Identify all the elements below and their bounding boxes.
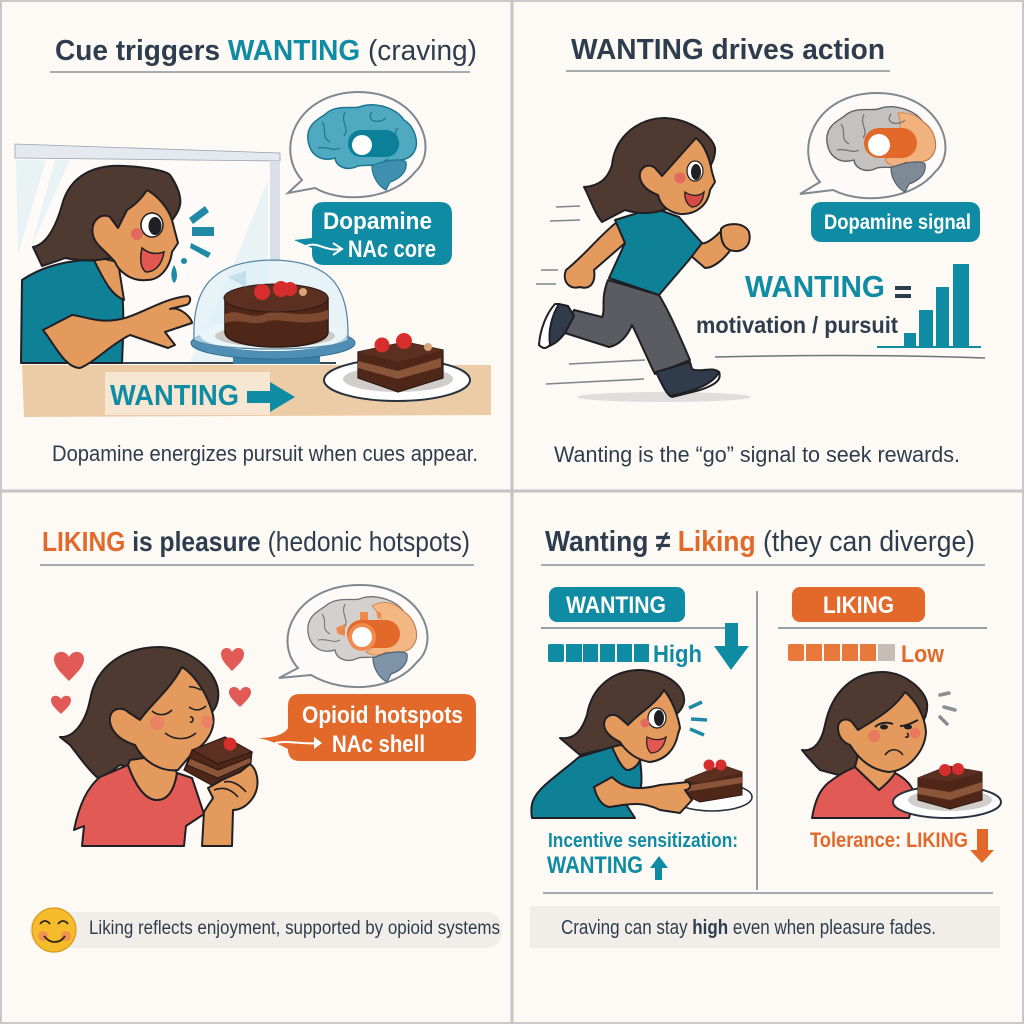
title: Wanting ≠ Liking (they can diverge): [545, 526, 975, 558]
wanting label and arrow: [105, 372, 295, 415]
window: [15, 144, 336, 365]
tolerance text: [810, 829, 994, 863]
counter: [22, 365, 491, 417]
callout: dopamine to NAc core: NAc core: [348, 236, 436, 263]
meter: liking low: Low: [901, 641, 944, 668]
title: LIKING is pleasure (hedonic hotspots): [42, 526, 470, 557]
hearts: [51, 648, 251, 714]
incentive sensitization text: WANTING: [547, 852, 643, 879]
wanting label and arrow: WANTING: [110, 380, 239, 412]
meter: wanting high: High: [653, 641, 702, 668]
cake under dome: [191, 260, 355, 364]
disappointment marks: [940, 693, 955, 724]
equation text: motivation / pursuit: [696, 312, 898, 338]
title: Cue triggers WANTING (craving): [55, 35, 477, 67]
column: wanting: [531, 587, 752, 880]
incentive sensitization text: [547, 830, 738, 880]
caption band: [530, 906, 1000, 948]
tolerance text: Tolerance: LIKING: [810, 829, 968, 852]
cake slice on plate: [324, 333, 470, 401]
panel: liking is pleasure: [30, 526, 502, 952]
callout: opioid hotspots to NAc shell: NAc shell: [332, 731, 425, 758]
callout: opioid hotspots to NAc shell: [258, 694, 476, 761]
liking badge: [792, 587, 925, 622]
chocolate cake: [184, 737, 252, 787]
arrow: down: [714, 623, 749, 670]
caption: Dopamine energizes pursuit when cues appear.: [52, 441, 478, 466]
plate and cake: liking: [893, 763, 1001, 818]
column: liking: [778, 587, 1001, 863]
arm: wanting: [594, 777, 692, 813]
caption: Wanting is the “go” signal to seek rewards.: [554, 442, 960, 467]
panel: cue triggers wanting: [15, 35, 491, 466]
hand and forearm: [202, 764, 257, 846]
running girl: [539, 118, 751, 402]
face: wanting expression: [131, 213, 164, 272]
person: excited girl: [21, 166, 192, 368]
equation text: [696, 269, 911, 338]
callout: opioid hotspots to NAc shell: Opioid hotspots: [302, 702, 463, 729]
face: disappointed: [868, 720, 920, 755]
wanting badge: WANTING: [566, 592, 666, 619]
thought bubble with brain: [800, 93, 945, 198]
meter: wanting high: [548, 641, 702, 668]
caption band with smiley: Liking reflects enjoyment, supported by opioid systems: [89, 918, 500, 939]
face: happy: [674, 161, 704, 207]
label: dopamine signal: Dopamine signal: [824, 211, 971, 234]
callout: dopamine to NAc core: [294, 202, 452, 265]
wanting badge: [549, 587, 685, 622]
panel: wanting not equal liking: [530, 526, 1001, 948]
meter: liking low: [788, 641, 944, 668]
panel: wanting drives action: [536, 34, 985, 467]
icon: smiley: [32, 908, 76, 952]
title: WANTING drives action: [571, 34, 885, 66]
incentive sensitization text: Incentive sensitization:: [548, 830, 738, 852]
excitement marks: [689, 702, 707, 735]
face: wanting: [640, 708, 666, 753]
label: dopamine signal: [811, 202, 980, 242]
excitement marks: [171, 206, 214, 283]
equation text: WANTING: [745, 269, 885, 304]
person: wanting: [531, 670, 684, 818]
bar chart: rising motivation: [877, 264, 981, 348]
plate and cake: wanting: [672, 760, 752, 811]
thought bubble with brain: [288, 92, 425, 197]
liking badge: LIKING: [823, 592, 894, 619]
person: disappointed: [802, 672, 927, 818]
callout: dopamine to NAc core: Dopamine: [323, 208, 432, 235]
caption band with smiley: [30, 908, 502, 952]
face: blissful: [150, 687, 213, 739]
caption band: Craving can stay high even when pleasure fades.: [561, 917, 936, 939]
thought bubble with brain: [279, 585, 427, 687]
person: enjoying cake: [60, 647, 218, 846]
motion lines: [536, 206, 645, 384]
